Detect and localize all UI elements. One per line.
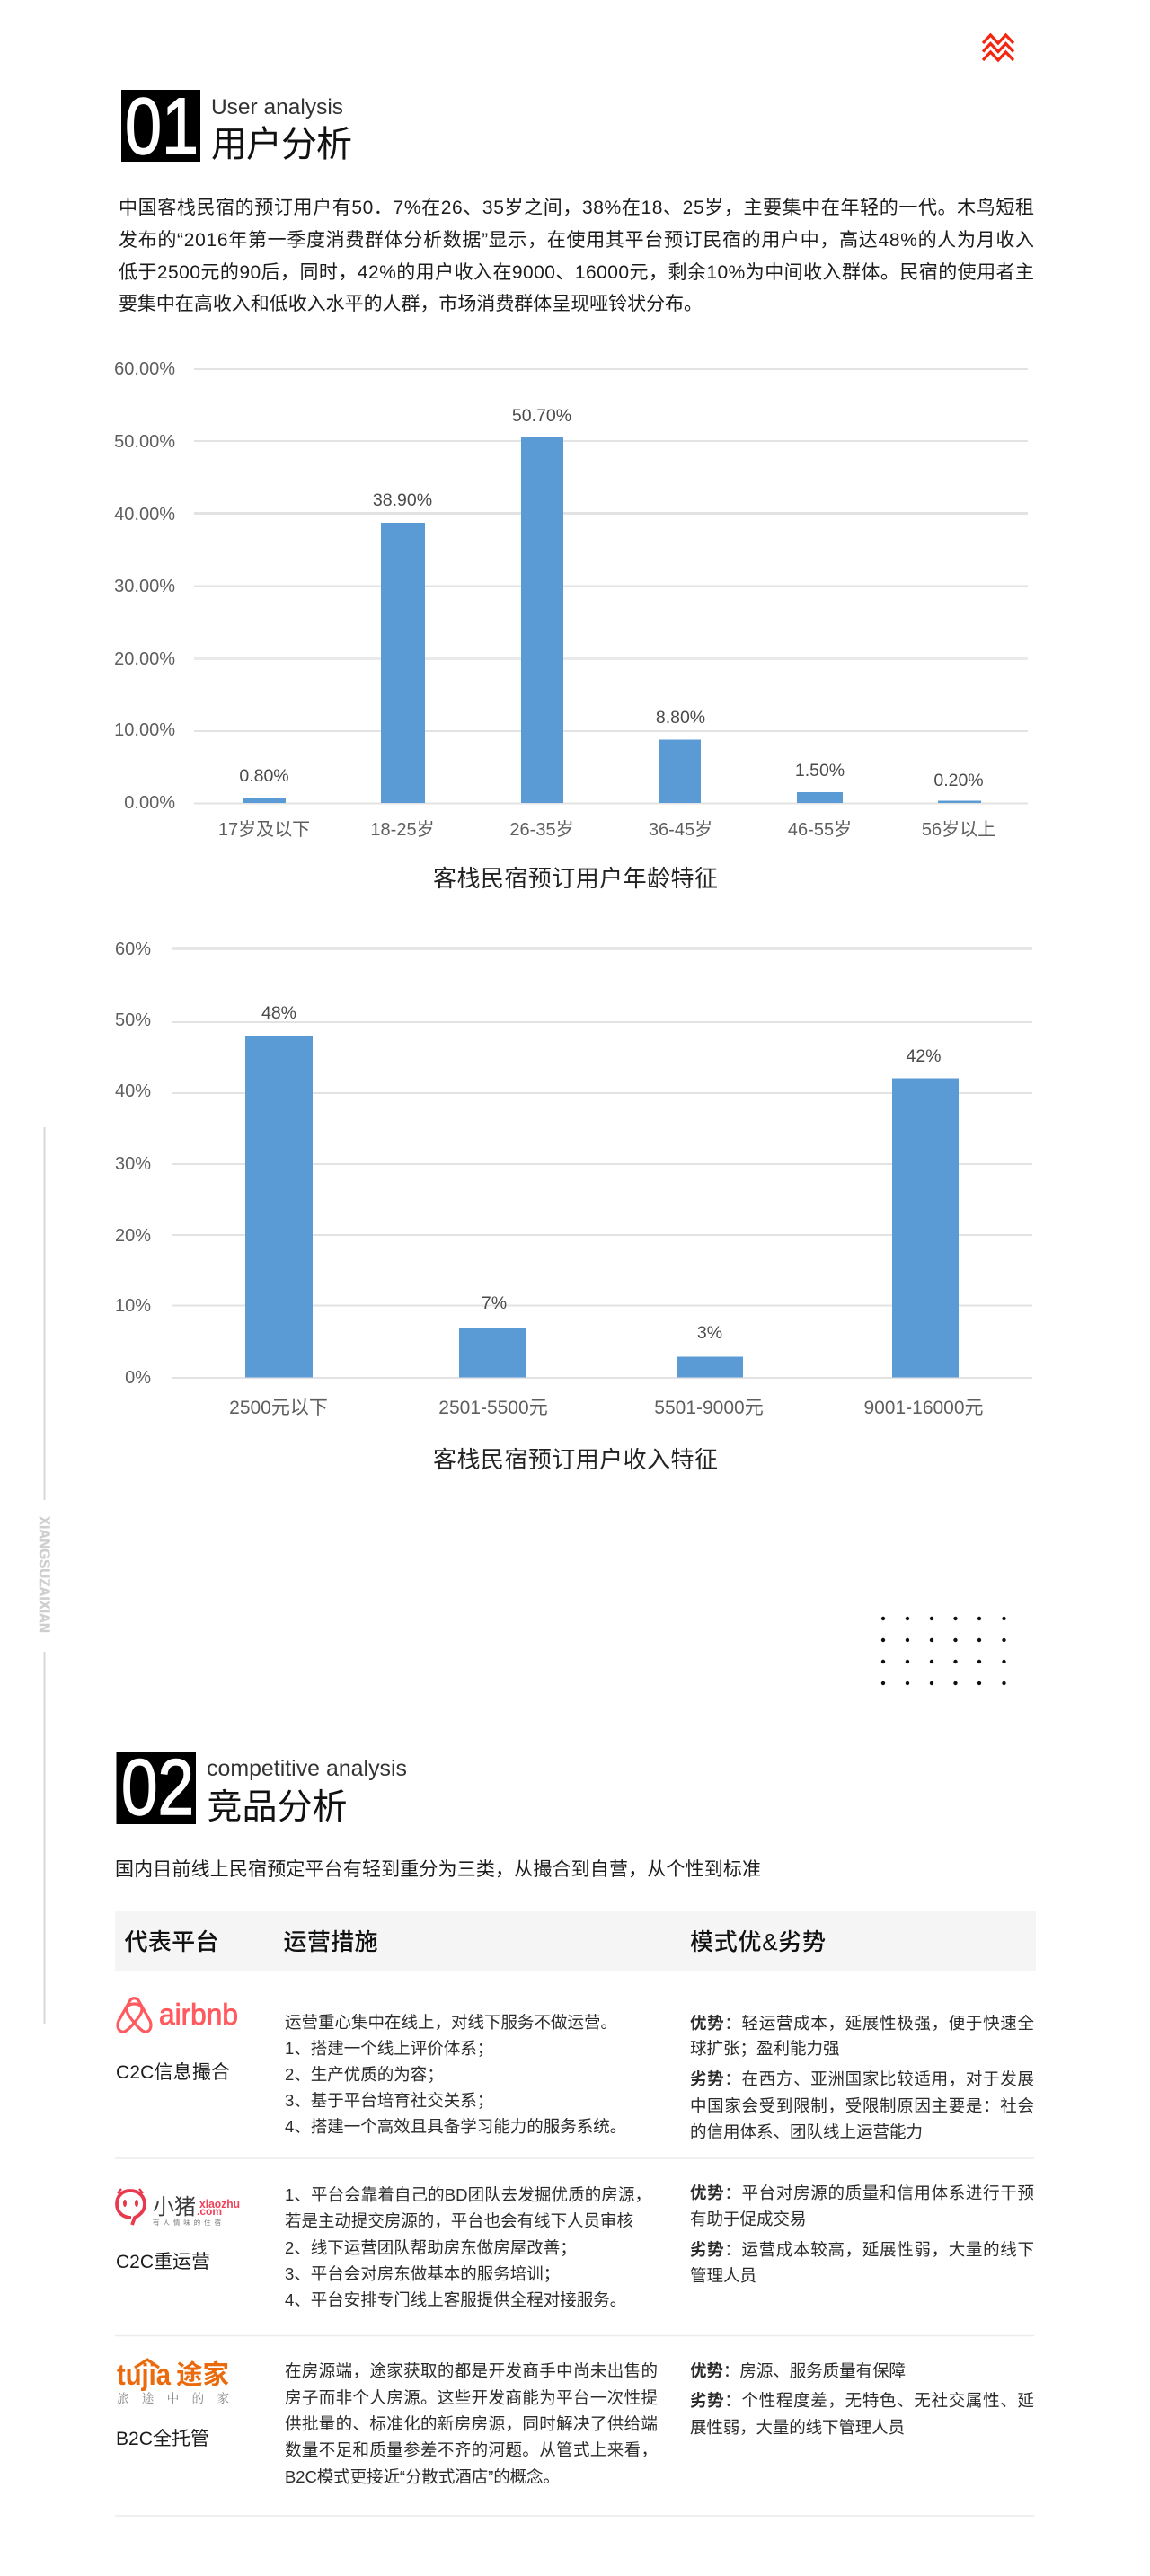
logo: tujia: 途家 bbox=[176, 2360, 229, 2390]
section heading: 01 user analysis: User analysis bbox=[211, 95, 343, 119]
table row: airbnb: 2、生产优质的为容； bbox=[285, 2065, 444, 2084]
table row: airbnb bbox=[115, 1998, 1034, 2158]
table row: airbnb: 1、搭建一个线上评价体系； bbox=[285, 2039, 493, 2058]
table header: 运营措施 bbox=[284, 1928, 377, 1955]
bar chart: income distribution: 客栈民宿预订用户收入特征 bbox=[433, 1446, 718, 1473]
bar chart: age distribution: 1.50% bbox=[795, 761, 845, 781]
table header bbox=[115, 1911, 1036, 1971]
logo: xiaozhu: xiaozhu bbox=[199, 2198, 240, 2210]
text block: competitive intro: 国内目前线上民宿预定平台有轻到重分为三类，从撮合到自营，从个性到标准 bbox=[115, 1859, 761, 1880]
bar chart: age distribution: 0.00% bbox=[124, 793, 175, 813]
bar chart: age distribution: 50.70% bbox=[512, 406, 571, 426]
bar chart: age distribution: 36-45岁 bbox=[649, 819, 712, 840]
table row: xiaozhu: 1、平台会靠着自己的BD团队去发掘优质的房源， bbox=[285, 2185, 651, 2204]
bar chart: income distribution: 50% bbox=[115, 1010, 151, 1030]
table row: xiaozhu: 2、线下运营团队帮助房东做房屋改善； bbox=[285, 2238, 577, 2257]
table row: airbnb: C2C信息撮合 bbox=[116, 2062, 230, 2083]
section heading: 02 competitive analysis bbox=[117, 1742, 407, 1831]
bar chart: age distribution: 17岁及以下 bbox=[218, 819, 310, 840]
table header: 代表平台 bbox=[124, 1928, 219, 1955]
section heading: 01 user analysis bbox=[121, 81, 352, 171]
table row: tujia: 展性弱，大量的线下管理人员 bbox=[690, 2418, 905, 2437]
bar chart: income distribution bbox=[115, 940, 1032, 1473]
table row: xiaozhu: 若是主动提交房源的，平台也会有线下人员审核 bbox=[285, 2211, 633, 2230]
table row: airbnb: 4、搭建一个高效且具备学习能力的服务系统。 bbox=[285, 2117, 626, 2136]
logo: tujia: tujia bbox=[117, 2358, 172, 2391]
text block: user analysis intro: 发布的“2016年第一季度消费群体分析数据”显示，在使用其平台预订民宿的用户中，高达48%的人为月收入 bbox=[119, 230, 1034, 251]
bar chart: age distribution: 10.00% bbox=[114, 720, 175, 740]
text block: user analysis intro: 中国客栈民宿的预订用户有50．7%在26、35岁之间，38%在18、25岁，主要集中在年轻的一代。木鸟短租 bbox=[119, 198, 1034, 218]
bar chart: income distribution: 9001-16000元 bbox=[863, 1398, 984, 1418]
logo: xiaozhu: 小猪 bbox=[153, 2195, 196, 2219]
bar chart: income distribution: 5501-9000元 bbox=[654, 1398, 764, 1418]
side decoration: vertical lines and rotated text: XIANGSUZAIXIAN bbox=[36, 1516, 53, 1633]
section heading: 02 competitive analysis: 02 bbox=[121, 1742, 194, 1831]
table row: xiaozhu bbox=[115, 2183, 1034, 2335]
table row: airbnb: 3、基于平台培育社交关系； bbox=[285, 2091, 493, 2110]
text block: user analysis intro: 低于2500元的90后，同时，42%的用户收入在9000、16000元，剩余10%为中间收入群体。民宿的使用者主 bbox=[119, 262, 1034, 283]
table row: airbnb: 优势：轻运营成本，延展性极强，便于快速全 bbox=[690, 2014, 1034, 2033]
bar chart: age distribution: 客栈民宿预订用户年龄特征 bbox=[433, 865, 718, 892]
table row: xiaozhu: 4、平台安排专门线上客服提供全程对接服务。 bbox=[285, 2290, 626, 2309]
section heading: 01 user analysis: 01 bbox=[125, 81, 199, 171]
table row: xiaozhu: 有助于促成交易 bbox=[690, 2210, 807, 2228]
table row: xiaozhu: 劣势：运营成本较高，延展性弱，大量的线下 bbox=[690, 2240, 1034, 2259]
logo: airbnb: airbnb bbox=[159, 1998, 238, 2031]
table row: tujia: 优势：房源、服务质量有保障 bbox=[690, 2361, 906, 2380]
bar chart: age distribution bbox=[114, 359, 1028, 892]
table row: airbnb: 的信用体系、团队线上运营能力 bbox=[690, 2122, 923, 2141]
table row: xiaozhu: 管理人员 bbox=[690, 2266, 756, 2285]
bar chart: age distribution: 40.00% bbox=[114, 505, 175, 525]
table row: tujia: 房子而非个人房源。这些开发商能为平台一次性提 bbox=[285, 2388, 658, 2407]
table header: 模式优&劣势 bbox=[690, 1928, 826, 1955]
bar chart: age distribution: 26-35岁 bbox=[509, 819, 574, 840]
table row: xiaozhu: C2C重运营 bbox=[116, 2252, 210, 2272]
bar chart: income distribution: 20% bbox=[115, 1226, 151, 1246]
table row: airbnb: 中国家会受到限制，受限制原因主要是：社会 bbox=[690, 2096, 1034, 2115]
bar chart: age distribution: 38.90% bbox=[373, 490, 432, 510]
logo: xiaozhu: .com bbox=[197, 2207, 222, 2218]
section heading: 02 competitive analysis: competitive analysis bbox=[207, 1756, 407, 1781]
bar chart: age distribution: 46-55岁 bbox=[788, 819, 852, 840]
bar chart: age distribution: 0.80% bbox=[239, 766, 289, 786]
logo: tujia: 旅途中的家 bbox=[117, 2388, 229, 2406]
text block: user analysis intro: 要集中在高收入和低收入水平的人群，市场消费群体呈现哑铃状分布。 bbox=[119, 294, 703, 314]
table row: tujia: 劣势：个性程度差，无特色、无社交属性、延 bbox=[690, 2391, 1034, 2410]
section heading: 01 user analysis: 用户分析 bbox=[211, 125, 352, 164]
bar chart: income distribution: 10% bbox=[115, 1296, 151, 1316]
table row: tujia bbox=[115, 2358, 1034, 2516]
bar chart: income distribution: 42% bbox=[906, 1046, 942, 1066]
bar chart: income distribution: 40% bbox=[115, 1081, 151, 1101]
bar chart: age distribution: 30.00% bbox=[114, 577, 175, 596]
dot grid decoration bbox=[881, 1617, 1006, 1685]
bar chart: income distribution: 7% bbox=[482, 1293, 507, 1313]
logo: xiaozhu: 有人情味的住宿 bbox=[153, 2218, 221, 2227]
section heading: 02 competitive analysis: 竞品分析 bbox=[207, 1788, 347, 1827]
logo: xiaozhu bbox=[117, 2189, 240, 2227]
bar chart: age distribution: 56岁以上 bbox=[922, 819, 995, 840]
table row: xiaozhu: 优势：平台对房源的质量和信用体系进行干预 bbox=[690, 2183, 1034, 2202]
bar chart: income distribution: 2500元以下 bbox=[229, 1398, 328, 1418]
table row: airbnb: 劣势：在西方、亚洲国家比较适用，对于发展 bbox=[690, 2069, 1034, 2088]
bar chart: income distribution: 0% bbox=[125, 1368, 151, 1388]
bar chart: age distribution: 20.00% bbox=[114, 649, 175, 669]
table row: tujia: B2C全托管 bbox=[116, 2429, 209, 2449]
bar chart: income distribution: 30% bbox=[115, 1154, 151, 1174]
table row: xiaozhu: 3、平台会对房东做基本的服务培训； bbox=[285, 2264, 560, 2283]
logo: airbnb bbox=[118, 1998, 238, 2032]
bar chart: income distribution: 2501-5500元 bbox=[438, 1398, 548, 1418]
table row: tujia: 供批量的、标准化的新房房源，同时解决了供给端 bbox=[285, 2414, 658, 2433]
table row: tujia: 在房源端，途家获取的都是开发商手中尚未出售的 bbox=[285, 2361, 658, 2380]
icon: red zigzag chevrons bbox=[983, 35, 1013, 60]
table row: airbnb: 运营重心集中在线上，对线下服务不做运营。 bbox=[285, 2013, 617, 2032]
bar chart: age distribution: 18-25岁 bbox=[370, 819, 435, 840]
bar chart: age distribution: 8.80% bbox=[656, 708, 705, 728]
bar chart: income distribution: 60% bbox=[115, 940, 151, 959]
table row: tujia: 数量不足和质量参差不齐的河题。从管式上来看， bbox=[285, 2440, 658, 2459]
table row: airbnb: 球扩张；盈利能力强 bbox=[690, 2039, 840, 2058]
bar chart: age distribution: 50.00% bbox=[114, 432, 175, 452]
text block: user analysis intro bbox=[119, 198, 1034, 314]
bar chart: age distribution: 0.20% bbox=[933, 771, 984, 790]
bar chart: income distribution: 3% bbox=[697, 1323, 722, 1343]
bar chart: income distribution: 48% bbox=[261, 1003, 296, 1023]
bar chart: age distribution: 60.00% bbox=[114, 359, 175, 379]
table row: tujia: B2C模式更接近“分散式酒店”的概念。 bbox=[285, 2467, 560, 2486]
logo: tujia bbox=[117, 2358, 229, 2406]
